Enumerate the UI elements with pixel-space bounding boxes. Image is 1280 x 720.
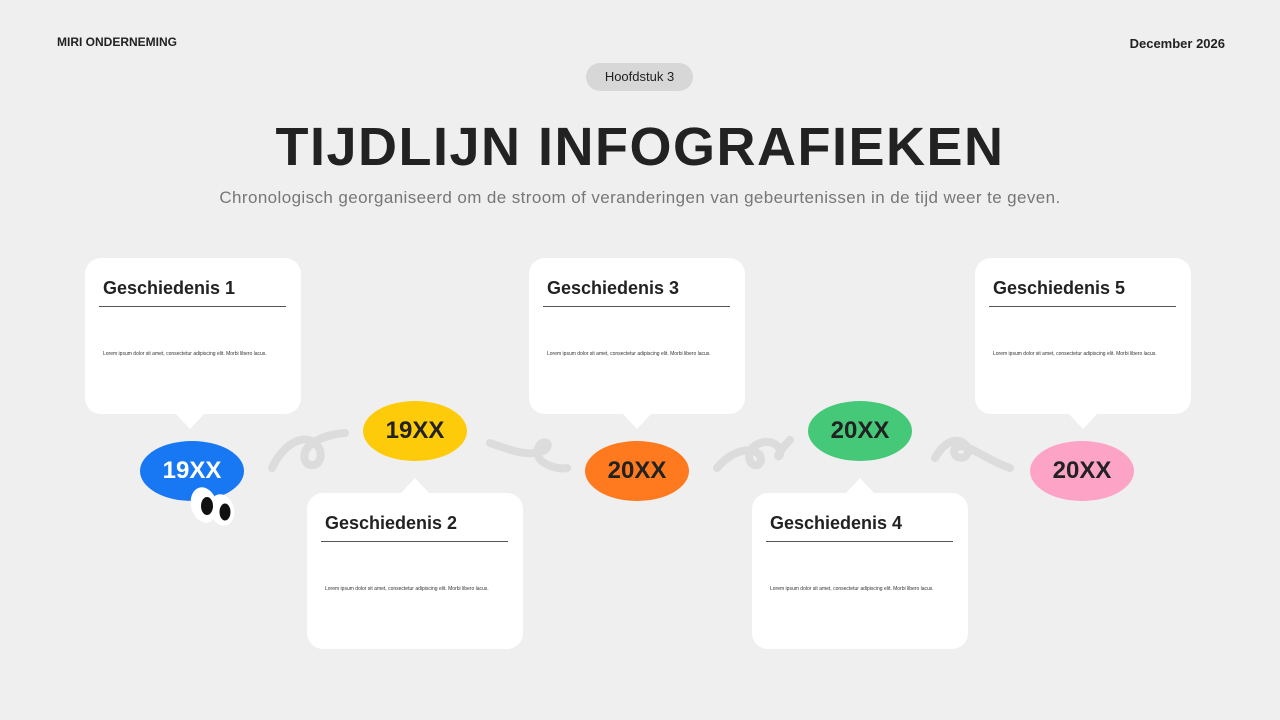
subtitle: Chronologisch georganiseerd om de stroom of veranderingen van gebeurtenissen in de tijd weer te geven. bbox=[219, 188, 1061, 207]
card 1: Lorem ipsum dolor sit amet, consectetur adipiscing elit. Morbi libero lacus. bbox=[103, 351, 267, 357]
card 2 bbox=[307, 493, 523, 649]
chapter pill bbox=[586, 63, 693, 91]
oval 2: 19XX bbox=[386, 417, 444, 444]
card 4: Lorem ipsum dolor sit amet, consectetur adipiscing elit. Morbi libero lacus. bbox=[770, 586, 934, 592]
oval 5: 20XX bbox=[1053, 457, 1111, 484]
card 1: Geschiedenis 1 bbox=[103, 278, 235, 298]
card 5 bbox=[975, 258, 1191, 414]
oval 4 bbox=[808, 401, 912, 461]
card 3: Geschiedenis 3 bbox=[547, 278, 679, 298]
oval 3 bbox=[585, 441, 689, 501]
card 2: Lorem ipsum dolor sit amet, consectetur adipiscing elit. Morbi libero lacus. bbox=[325, 586, 489, 592]
title: TIJDLIJN INFOGRAFIEKEN bbox=[275, 117, 1005, 177]
date: December 2026 bbox=[1130, 36, 1225, 51]
card 1 bbox=[85, 258, 301, 414]
chapter pill: Hoofdstuk 3 bbox=[605, 69, 674, 84]
card 3: Lorem ipsum dolor sit amet, consectetur adipiscing elit. Morbi libero lacus. bbox=[547, 351, 711, 357]
oval 3: 20XX bbox=[608, 457, 666, 484]
card 4 bbox=[752, 493, 968, 649]
card 3 bbox=[529, 258, 745, 414]
card 2: Geschiedenis 2 bbox=[325, 513, 457, 533]
card 5: Lorem ipsum dolor sit amet, consectetur adipiscing elit. Morbi libero lacus. bbox=[993, 351, 1157, 357]
card 5: Geschiedenis 5 bbox=[993, 278, 1125, 298]
brand: MIRI ONDERNEMING bbox=[57, 35, 177, 49]
oval 4: 20XX bbox=[831, 417, 889, 444]
card 4: Geschiedenis 4 bbox=[770, 513, 902, 533]
oval 2 bbox=[363, 401, 467, 461]
icon: eyes bbox=[190, 487, 234, 526]
oval 1: 19XX bbox=[163, 457, 221, 484]
oval 5 bbox=[1030, 441, 1134, 501]
oval 1 bbox=[140, 441, 244, 501]
